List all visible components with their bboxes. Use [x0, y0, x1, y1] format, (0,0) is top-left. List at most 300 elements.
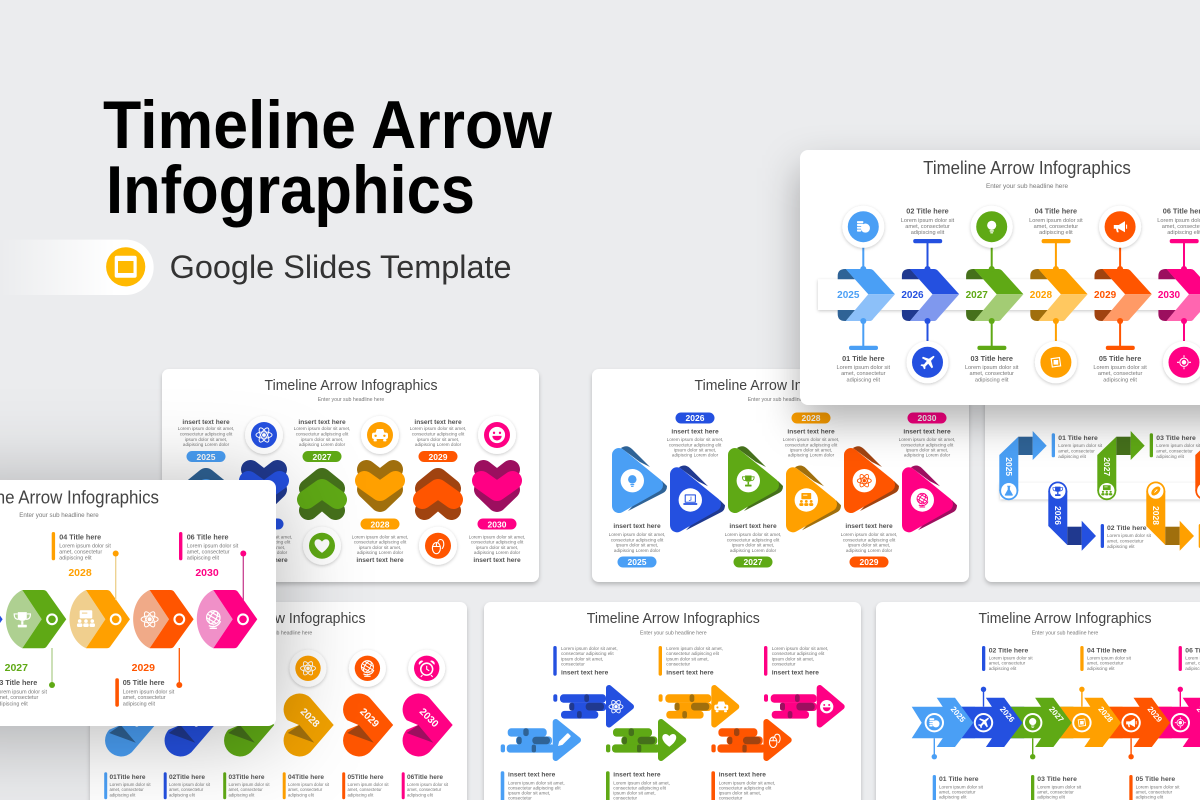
panel title: Timeline Arrow Infographics — [694, 378, 868, 394]
chevron 2028: amet, consectetur — [1034, 224, 1078, 230]
chevron 2028: Lorem ipsum dolor sit — [1029, 218, 1083, 224]
icon: globe badge — [349, 650, 386, 687]
text: 05: 05Title here — [348, 774, 384, 781]
column 2025: ipsum dolor sit amet, — [185, 437, 227, 442]
column 2030: insert text here — [473, 557, 521, 564]
text: 01: adipiscing elit — [939, 795, 967, 800]
icon: clock badge — [408, 650, 445, 687]
callout 2028: amet, consectetur — [59, 550, 102, 556]
triangle 2026: 2026 — [686, 413, 705, 423]
column 2030: 2030 — [488, 519, 507, 529]
text block lower 2: insert text here — [613, 772, 661, 779]
text: 04: 04Title here — [288, 774, 324, 781]
text block upper 2: insert text here — [666, 669, 714, 676]
callout 2028: 2028 — [68, 567, 92, 579]
text: 04: Lorem ipsum dolor sit — [1087, 655, 1132, 660]
chevron 2026: adipiscing elit — [911, 230, 945, 236]
panel: striped arrow timeline — [484, 602, 861, 800]
bent arrow 2027: amet, consectetur — [1156, 448, 1193, 454]
text: 02: 02 Title here — [989, 648, 1028, 654]
callout 2030: amet, consectetur — [187, 550, 230, 556]
heart arrow 2029: 2029 — [357, 706, 381, 730]
text block upper 2 — [659, 646, 723, 676]
text: 05: adipiscing elit — [1136, 795, 1164, 800]
callout 2030: 2030 — [195, 567, 219, 579]
panel subtitle: Enter your sub headline here — [1032, 630, 1098, 636]
chevron 2030: 2030 — [1158, 290, 1181, 301]
text: 04: amet, consectetur — [288, 787, 323, 792]
text: 02: amet, consectetur — [989, 661, 1026, 666]
triangle 2027: 2027 — [744, 557, 763, 567]
column 2026: insert text here — [240, 557, 288, 564]
column 2030: adipiscing Lorem dolor — [474, 550, 521, 555]
chevron 2027: amet, consectetur — [969, 371, 1014, 377]
triangle 2030: adipiscing Lorem dolor — [904, 453, 951, 458]
panel title: Timeline Arrow Infographics — [587, 611, 760, 627]
panel subtitle: Enter your sub headline here — [986, 183, 1068, 190]
column 2028: ipsum dolor sit amet, — [359, 545, 401, 550]
heart arrow 2025 — [105, 694, 155, 756]
triangle 2028 — [783, 412, 841, 530]
callout 2028: adipiscing elit — [59, 556, 92, 562]
triangle 2026: adipiscing Lorem dolor — [672, 453, 719, 458]
text block lower 1: Lorem ipsum dolor sit amet, — [508, 780, 565, 785]
triangle 2027 — [725, 446, 783, 568]
callout 2029: 2029 — [132, 662, 155, 674]
triangle 2027: ipsum dolor sit amet, — [732, 543, 774, 548]
panel: hexagon arrow timeline (overlay) — [0, 480, 276, 726]
text: 02: adipiscing elit — [989, 666, 1017, 671]
triangle 2026: Lorem ipsum dolor sit amet, — [667, 437, 723, 442]
text block upper 1: insert text here — [561, 669, 609, 676]
text: 05 — [1129, 775, 1180, 800]
text: 04 — [1080, 646, 1132, 671]
column 2028: adipiscing Lorem dolor — [357, 550, 404, 555]
triangle 2025 — [609, 446, 667, 568]
chevron 2029: amet, consectetur — [1098, 371, 1142, 377]
text: 05: amet, consectetur — [348, 787, 382, 792]
triangle 2028: Lorem ipsum dolor sit amet, — [783, 437, 839, 442]
callout 2029 — [115, 648, 182, 707]
callout 2030: adipiscing elit — [187, 556, 220, 562]
bent arrow 2027: 2027 — [1102, 457, 1112, 476]
hex arrow blue — [0, 590, 3, 648]
chevron 2029: 2029 — [1094, 290, 1117, 301]
text: 01: amet, consectetur — [939, 789, 976, 794]
bent arrow 2025: adipiscing elit — [1058, 454, 1087, 459]
callout 2030 — [179, 532, 246, 600]
striped arrow: mouse — [711, 722, 789, 758]
bent arrow 2026: 2026 — [1053, 506, 1063, 525]
bent arrow 2028: 2028 — [1151, 506, 1161, 525]
chevron 2027: adipiscing elit — [975, 378, 1009, 384]
text block lower 1: consectetur adipiscing elit — [508, 785, 561, 790]
chevron 2029: 2029 — [1146, 705, 1164, 725]
text block lower 3: insert text here — [719, 772, 766, 779]
chevron band — [912, 707, 1200, 738]
text block lower 2: consectetur adipiscing elit — [613, 785, 667, 790]
text block lower 1 — [501, 771, 565, 800]
column 2029: ipsum dolor sit amet, — [417, 437, 459, 442]
text: 05: adipiscing elit — [348, 792, 374, 798]
main heading: Timeline Arrow — [103, 87, 553, 163]
main heading — [103, 87, 553, 228]
column 2027 — [294, 419, 350, 565]
text: 05: Lorem ipsum dolor sit — [348, 782, 389, 787]
bent arrow 2026: amet, consectetur — [1107, 538, 1144, 544]
triangle 2026 — [667, 412, 725, 530]
panel subtitle: Enter your sub headline here — [640, 630, 707, 636]
text: 03 — [223, 772, 270, 799]
striped arrow: car — [659, 688, 736, 724]
chevron 2029: 05 Title here — [1099, 354, 1141, 363]
text: 04: 04 Title here — [1087, 648, 1127, 654]
text: 03: amet, consectetur — [1037, 789, 1074, 794]
text: 05: 05 Title here — [1136, 776, 1175, 783]
text: 04: adipiscing elit — [1087, 666, 1115, 671]
bent arrow 2026: adipiscing elit — [1107, 544, 1135, 549]
text: 04: adipiscing elit — [288, 792, 315, 798]
text: 06: amet, consectetur — [407, 787, 442, 792]
heart arrow 2027: 2027 — [238, 706, 262, 730]
column 2027: consectetur adipiscing elit — [296, 432, 349, 436]
chevron 2026: 2026 — [998, 705, 1017, 725]
column 2029: consectetur adipiscing elit — [412, 432, 465, 436]
triangle 2028: adipiscing Lorem dolor — [788, 453, 835, 458]
text: 02 — [982, 646, 1033, 671]
hex arrow 2029 — [133, 590, 194, 648]
chevron 2027: Lorem ipsum dolor sit — [965, 365, 1019, 371]
bent arrow 2025 — [999, 431, 1103, 500]
column 2025: adipiscing Lorem dolor — [183, 442, 230, 447]
heart arrow 2026: 2026 — [179, 706, 203, 730]
callout 2029: Lorem ipsum dolor sit — [123, 689, 175, 695]
striped arrow: pencil — [501, 722, 578, 758]
bent arrow 2025: Lorem ipsum dolor sit — [1058, 443, 1103, 448]
chevron 2028: 2028 — [1030, 290, 1052, 301]
column 2030: Lorem ipsum dolor sit amet, — [469, 534, 525, 540]
subtitle: Google Slides Template — [170, 249, 512, 285]
chevron 2029: adipiscing elit — [1103, 378, 1137, 384]
striped arrow: heart — [606, 722, 683, 758]
hex arrow 2027 — [6, 590, 66, 648]
chevron 2028: adipiscing elit — [1039, 230, 1073, 236]
bent arrow 2025: amet, consectetur — [1058, 448, 1095, 454]
icon: Google Slides logo — [106, 247, 145, 286]
chevron 2025: 2025 — [837, 290, 860, 301]
column 2029: Lorem ipsum dolor sit amet, — [410, 426, 466, 431]
chevron 2026: 2026 — [901, 290, 924, 301]
text: 02: Lorem ipsum dolor sit — [989, 655, 1033, 660]
chevron 2027 — [1023, 698, 1072, 759]
triangle 2029: Lorem ipsum dolor sit amet, — [841, 532, 897, 537]
heart arrow 2025: 2025 — [119, 706, 143, 730]
chevron 2030 — [1171, 687, 1200, 747]
text: 06: Lorem ipsum dolor sit — [407, 782, 449, 787]
bent arrow 2027: 03 Title here — [1156, 435, 1196, 442]
column 2026: consectetur adipiscing elit — [238, 540, 291, 544]
callout 2028: Lorem ipsum dolor sit — [59, 544, 111, 550]
column 2025: 2025 — [197, 452, 216, 462]
panel title: Timeline Arrow Infographics — [192, 611, 366, 627]
bent arrow 2029 — [1195, 437, 1200, 500]
text block lower 3 — [711, 771, 775, 800]
text: 03: Lorem ipsum dolor sit — [228, 782, 270, 787]
chevron 2027: 2027 — [966, 290, 988, 301]
column 2025: consectetur adipiscing elit — [180, 432, 233, 436]
triangle 2025: insert text here — [613, 523, 661, 530]
text: 05: amet, consectetur — [1136, 789, 1173, 794]
chevron 2030: adipiscing elit — [1167, 230, 1200, 236]
chevron 2029: Lorem ipsum dolor sit — [1093, 365, 1147, 371]
text block upper 3: consectetur — [772, 662, 796, 667]
bent arrow 2028 — [1146, 482, 1200, 551]
text block lower 1: ipsum dolor sit amet, — [508, 791, 550, 796]
text: 01: Lorem ipsum dolor sit — [110, 782, 151, 787]
heart arrow 2029 — [343, 694, 393, 756]
triangle 2029: consectetur adipiscing elit — [843, 537, 896, 542]
text: 01: 01 Title here — [939, 776, 979, 783]
text: 02: amet, consectetur — [169, 787, 204, 792]
callout 2030: 06 Title here — [187, 532, 229, 541]
text: 05: Lorem ipsum dolor sit — [1136, 784, 1180, 789]
callout 2028 — [52, 532, 119, 600]
text block lower 3: consectetur adipiscing elit — [719, 785, 772, 790]
column 2027: Lorem ipsum dolor sit amet, — [294, 426, 350, 431]
panel: chevron timeline with band (overlay) — [800, 150, 1200, 405]
chevron 2028: 2028 — [1096, 705, 1115, 725]
triangle 2030: consectetur adipiscing elit — [901, 442, 954, 447]
bent arrow 2026: 02 Title here — [1107, 525, 1147, 532]
chevron 2028 — [1072, 687, 1121, 747]
chevron 2026: amet, consectetur — [905, 224, 950, 230]
heart arrow 2027 — [224, 694, 274, 756]
text: 04: amet, consectetur — [1087, 661, 1124, 666]
text: 01: Lorem ipsum dolor sit — [939, 784, 984, 789]
badge: Google Slides template — [0, 240, 512, 295]
text block upper 2: consectetur — [666, 662, 691, 667]
triangle 2026: insert text here — [671, 428, 719, 436]
triangle 2027: adipiscing Lorem dolor — [730, 548, 777, 553]
chevron 2029 — [1093, 206, 1152, 384]
text: 01 — [933, 775, 984, 800]
triangle 2027: Lorem ipsum dolor sit amet, — [725, 532, 781, 537]
chevron 2025 — [925, 698, 973, 759]
column 2027: 2027 — [313, 452, 332, 462]
text: 06: adipiscing elit — [407, 792, 434, 798]
triangle 2027: consectetur adipiscing elit — [727, 537, 780, 542]
text block upper 2: ipsum dolor sit amet, — [666, 656, 709, 661]
bent arrow 2025: 01 Title here — [1058, 435, 1098, 442]
striped arrow: atom — [553, 688, 631, 724]
column 2026: ipsum dolor sit amet, — [243, 545, 285, 550]
bent arrow 2026 — [1048, 482, 1152, 551]
triangle 2030: 2030 — [918, 413, 937, 423]
text block upper 1: consectetur adipiscing elit — [561, 651, 614, 656]
text block upper 3: ipsum dolor sit amet, — [772, 656, 814, 661]
text block lower 3: Lorem ipsum dolor sit amet, — [719, 780, 775, 785]
column 2030: ipsum dolor sit amet, — [476, 545, 518, 550]
chevron 2025: adipiscing elit — [847, 378, 881, 384]
callout 2029: adipiscing elit — [123, 701, 156, 707]
triangle 2028: consectetur adipiscing elit — [785, 442, 838, 447]
panel title: Timeline Arrow Infographics — [264, 378, 438, 394]
text: 03: amet, consectetur — [228, 787, 263, 792]
column 2028: 2028 — [371, 519, 390, 529]
band — [818, 279, 1200, 310]
column 2029 — [410, 419, 466, 565]
triangle 2028: 2028 — [802, 413, 821, 423]
text block lower 3: ipsum dolor sit amet, — [719, 791, 761, 796]
panel subtitle: Enter your sub headline here — [246, 630, 312, 636]
column 2029: 2029 — [429, 452, 448, 462]
triangle 2029: insert text here — [845, 523, 893, 530]
main heading: Infographics — [106, 152, 475, 228]
text: 01: 01Title here — [110, 774, 146, 781]
text block upper 3: insert text here — [772, 669, 819, 676]
text block lower 2: ipsum dolor sit amet, — [613, 791, 656, 796]
callout 2027: 2027 — [5, 662, 28, 674]
triangle 2025: consectetur adipiscing elit — [611, 537, 664, 542]
heart arrow 2028: 2028 — [298, 706, 322, 730]
bent arrow 2027: Lorem ipsum dolor sit — [1156, 443, 1200, 448]
bent arrow 2027 — [1097, 431, 1200, 500]
chevron 2027: 03 Title here — [970, 354, 1013, 363]
triangle 2028: insert text here — [787, 428, 835, 436]
panel: chained chevron timeline — [876, 602, 1200, 800]
text block lower 2: Lorem ipsum dolor sit amet, — [613, 780, 670, 785]
text block upper 2: Lorem ipsum dolor sit amet, — [666, 646, 723, 651]
text: 03 — [1031, 775, 1082, 800]
triangle 2027: insert text here — [729, 523, 777, 530]
column 2030: consectetur adipiscing elit — [471, 540, 524, 544]
triangle 2029: ipsum dolor sit amet, — [848, 543, 890, 548]
column 2025: insert text here — [182, 419, 230, 426]
text: 04: Lorem ipsum dolor sit — [288, 782, 330, 787]
triangle 2030: insert text here — [903, 428, 951, 436]
panel title: Timeline Arrow Infographics — [923, 158, 1131, 178]
panel: chevron stack timeline — [162, 369, 539, 582]
text block upper 2: consectetur adipiscing elit — [666, 651, 720, 656]
panel subtitle: Enter your sub headline here — [748, 397, 814, 403]
text: 03: adipiscing elit — [1037, 795, 1066, 800]
triangle 2025: ipsum dolor sit amet, — [616, 543, 658, 548]
column 2029: insert text here — [414, 419, 462, 426]
text block upper 1: ipsum dolor sit amet, — [561, 656, 603, 661]
column 2027: adipiscing Lorem dolor — [299, 442, 346, 447]
chevron 2028 — [1029, 206, 1088, 383]
text: 02 — [164, 772, 211, 799]
text block lower 1: insert text here — [508, 772, 556, 779]
text: 04 — [283, 772, 330, 799]
column 2025: Lorem ipsum dolor sit amet, — [178, 426, 234, 431]
text block lower 2 — [606, 771, 670, 800]
striped arrow: smile — [764, 688, 842, 724]
text: 03: 03 Title here — [1037, 776, 1077, 783]
chevron 2030 — [1157, 206, 1200, 383]
triangle 2025: adipiscing Lorem dolor — [614, 548, 661, 553]
heart arrow 2028 — [284, 694, 334, 756]
triangle 2028: ipsum dolor sit amet, — [790, 448, 832, 452]
panel: bent arrow timeline — [985, 369, 1200, 582]
text block upper 1: Lorem ipsum dolor sit amet, — [561, 646, 618, 651]
callout 2029: amet, consectetur — [123, 695, 166, 701]
chevron 2026 — [901, 206, 959, 383]
column 2028: insert text here — [356, 557, 404, 564]
column 2027: insert text here — [298, 419, 346, 426]
text: 01 — [104, 772, 151, 799]
column 2027: ipsum dolor sit amet, — [301, 437, 343, 442]
text block upper 1: consectetur — [561, 662, 585, 667]
chevron 2026: 02 Title here — [906, 206, 949, 215]
bent arrow 2025: 2025 — [1004, 457, 1014, 476]
text: 01: amet, consectetur — [110, 787, 144, 792]
text: 06: 06Title here — [407, 774, 443, 781]
text block upper 3 — [764, 646, 828, 676]
panel title: Timeline Arrow Infographics — [978, 611, 1152, 627]
text: 01: adipiscing elit — [110, 792, 136, 798]
column 2026: Lorem ipsum dolor sit amet, — [236, 534, 292, 540]
text: 02: Lorem ipsum dolor sit — [169, 782, 211, 787]
panel subtitle: Enter your sub headline here — [318, 397, 384, 403]
text: 06 — [402, 772, 449, 799]
callout 2027 — [0, 648, 55, 707]
panel subtitle: Enter your sub headline here — [19, 512, 99, 519]
text block upper 3: Lorem ipsum dolor sit amet, — [772, 646, 828, 651]
column 2028: consectetur adipiscing elit — [354, 540, 407, 544]
text: 02: adipiscing elit — [169, 792, 196, 798]
bent arrow 2027: adipiscing elit — [1156, 454, 1185, 459]
triangle 2025: Lorem ipsum dolor sit amet, — [609, 532, 665, 537]
band — [1000, 483, 1200, 499]
hex arrow 2030 — [197, 590, 257, 648]
triangle 2025: 2025 — [628, 557, 647, 567]
chevron 2026: Lorem ipsum dolor sit — [901, 218, 955, 224]
chevron 2027: 2027 — [1047, 705, 1066, 725]
chevron 2026 — [974, 687, 1022, 747]
column 2028 — [352, 416, 408, 564]
heart arrow 2030: 2030 — [417, 706, 441, 730]
text block upper 1 — [553, 646, 618, 676]
triangle 2030 — [899, 412, 957, 530]
column 2026 — [236, 416, 292, 564]
hex arrow 2028 — [69, 590, 130, 648]
chevron 2028: 04 Title here — [1035, 206, 1077, 215]
panel: heart arrow timeline — [90, 602, 467, 800]
bent arrow 2026: Lorem ipsum dolor sit — [1107, 533, 1152, 538]
panel: triangle arrow timeline — [592, 369, 969, 582]
chevron 2025: 01 Title here — [842, 354, 885, 363]
chevron 2025: amet, consectetur — [841, 371, 886, 377]
text: 02: 02Title here — [169, 774, 205, 781]
column 2030 — [469, 416, 525, 564]
triangle 2029: 2029 — [860, 557, 879, 567]
triangle 2030: ipsum dolor sit amet, — [906, 448, 948, 452]
chevron 2029 — [1121, 698, 1170, 759]
chevron 2027 — [965, 206, 1023, 384]
heart arrow 2030 — [403, 694, 453, 756]
triangle 2029 — [841, 446, 899, 568]
callout 2029: 05 Title here — [123, 678, 165, 687]
triangle 2029: adipiscing Lorem dolor — [846, 548, 893, 553]
triangle 2026: ipsum dolor sit amet, — [674, 448, 716, 452]
callout 2028: 04 Title here — [59, 532, 101, 541]
column 2025 — [178, 419, 234, 510]
chevron 2025 — [837, 206, 895, 384]
triangle 2026: consectetur adipiscing elit — [669, 442, 722, 447]
heart arrow 2026 — [165, 694, 215, 756]
triangle 2030: Lorem ipsum dolor sit amet, — [899, 437, 955, 442]
